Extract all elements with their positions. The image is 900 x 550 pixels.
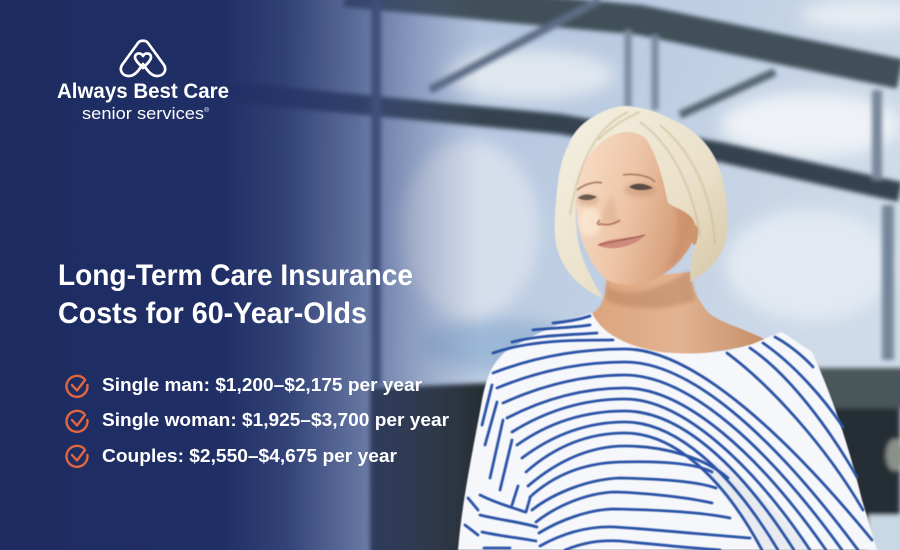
- neck shadow: [606, 270, 695, 308]
- navy gradient overlay: [0, 0, 480, 550]
- title: Costs for 60-Year-Olds: [58, 297, 367, 330]
- face: [576, 130, 698, 285]
- logo tagline: ®: [204, 107, 210, 114]
- title: [58, 259, 413, 330]
- shirt stripes: [465, 316, 872, 550]
- shirt fold shadows: [705, 462, 810, 550]
- face shading: [577, 179, 695, 270]
- item: single man: Single man: $1,200–$2,175 per year: [102, 375, 422, 395]
- shirt body: [458, 313, 877, 550]
- item: single woman: Single woman: $1,925–$3,700 per year: [102, 410, 449, 430]
- cost list: [66, 375, 449, 467]
- facial features: [577, 174, 698, 248]
- logo icon: house with heart: [121, 41, 165, 76]
- logo: [57, 41, 229, 123]
- hair: [555, 106, 728, 298]
- hair strands: [570, 112, 715, 245]
- logo tagline: senior services: [82, 105, 192, 123]
- check icon: [66, 446, 87, 467]
- photo subject: woman in striped top: [458, 106, 877, 550]
- check icon: [66, 411, 87, 432]
- neck and chest: [588, 272, 770, 358]
- check icon: [66, 376, 87, 397]
- logo wordmark: Always Best Care: [57, 80, 229, 103]
- title: Long-Term Care Insurance: [58, 259, 413, 292]
- item: couples: Couples: $2,550–$4,675 per year: [102, 446, 397, 466]
